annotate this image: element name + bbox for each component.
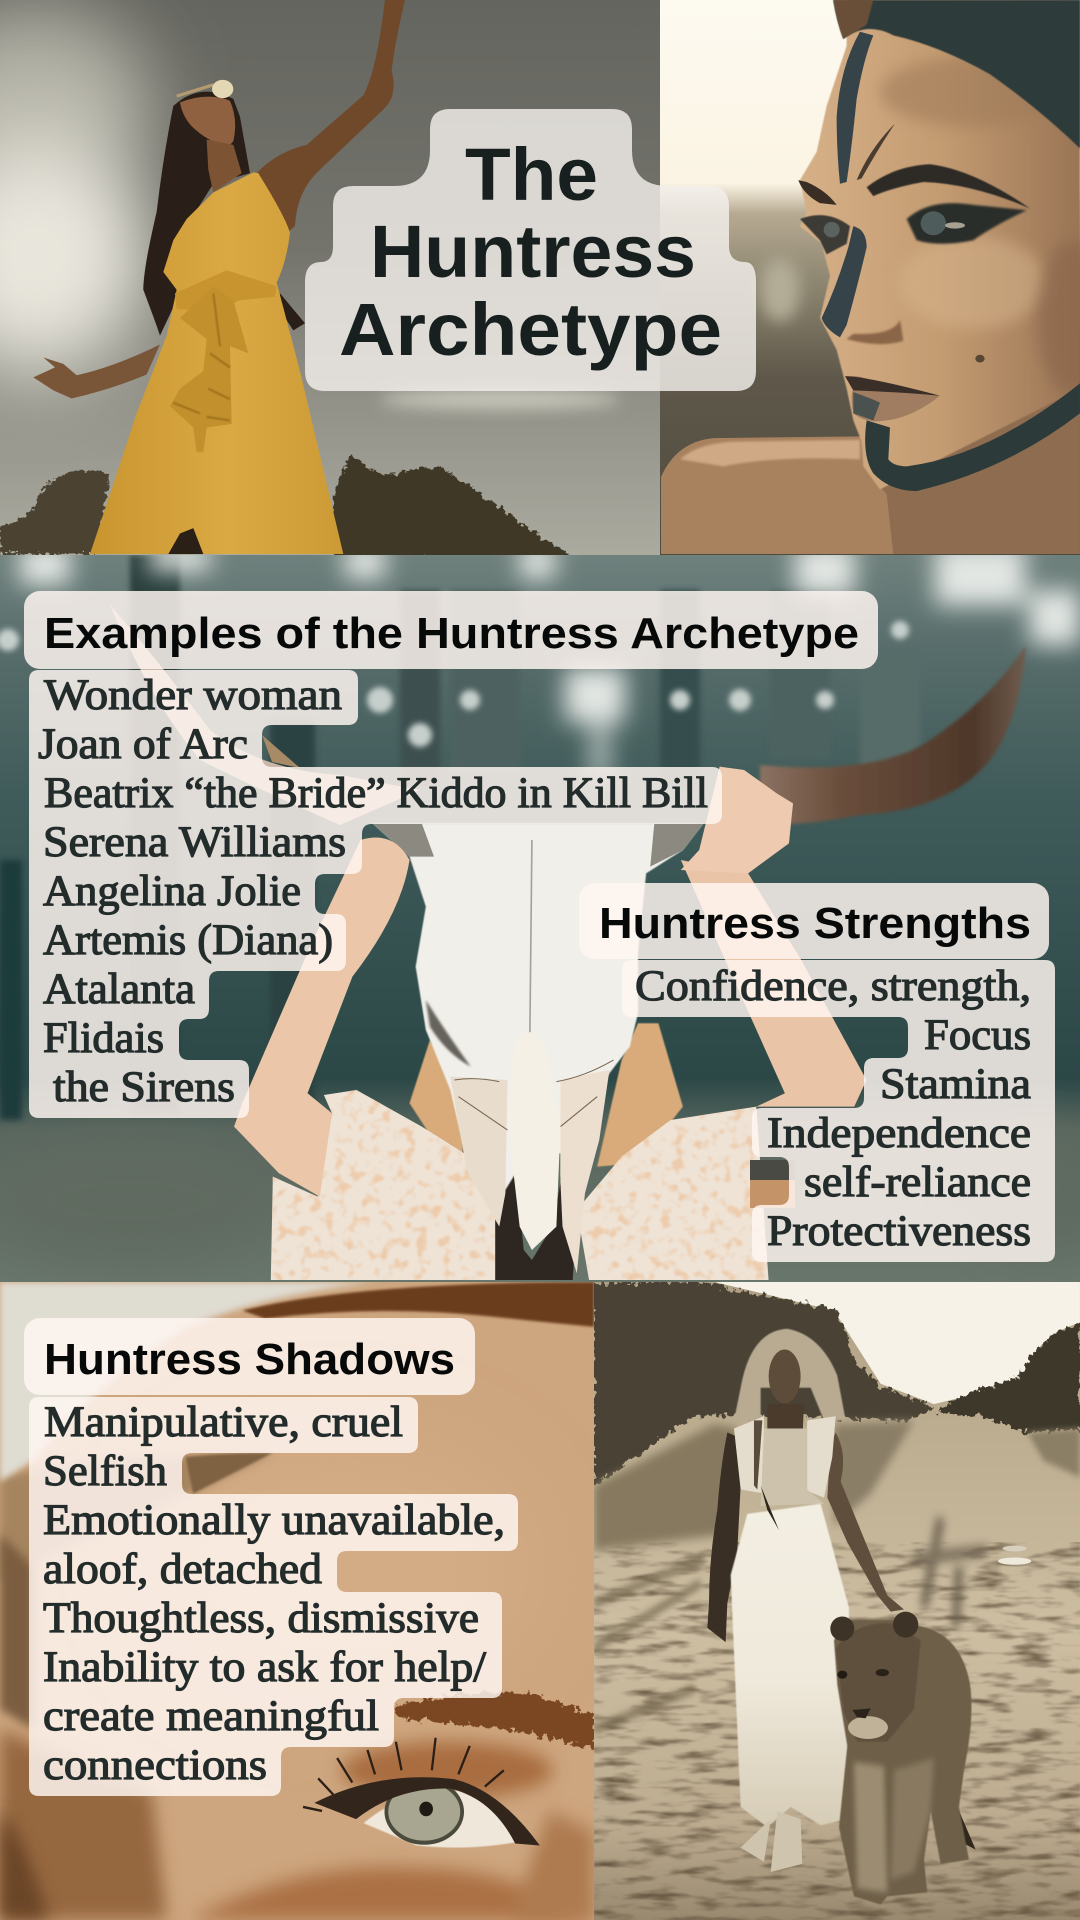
list: strengths: Confidence, strength, — [635, 963, 1031, 1010]
list: shadows: Inability to ask for help/ — [43, 1644, 486, 1691]
list: examples: Beatrix “the Bride” Kiddo in Kill Bill — [44, 770, 708, 817]
photo: face with black war paint — [660, 0, 1080, 555]
title pill — [305, 109, 756, 391]
panel: huntress strengths — [579, 883, 1055, 1262]
list: examples: Angelina Jolie — [43, 868, 301, 915]
list pill: strengths — [622, 960, 1055, 1262]
heading pill: examples — [24, 591, 878, 669]
list: examples: Wonder woman — [44, 672, 342, 719]
list: examples: Atalanta — [43, 966, 195, 1013]
list: examples — [38, 672, 708, 1111]
list: examples: the Sirens — [53, 1064, 235, 1111]
list: shadows: create meaningful — [43, 1693, 379, 1740]
list: examples: Flidais — [43, 1015, 164, 1062]
list: strengths: self-reliance — [804, 1159, 1031, 1206]
list: examples: Serena Williams — [43, 819, 346, 866]
photo: woman in yellow dress — [0, 0, 660, 558]
list: strengths: Stamina — [880, 1061, 1031, 1108]
list pill: examples — [29, 670, 722, 1118]
photo: woman walking with lioness on dirt road — [594, 1278, 1080, 1920]
list: shadows: Thoughtless, dismissive — [43, 1595, 479, 1642]
list pill: shadows — [29, 1397, 518, 1796]
list: shadows: connections — [43, 1742, 267, 1789]
list: strengths: Protectiveness — [767, 1208, 1031, 1255]
list: examples: Joan of Arc — [38, 721, 248, 768]
photo: woman holding bull skull in forest — [0, 545, 1080, 1282]
panel: huntress shadows — [24, 1318, 518, 1796]
list: shadows: Emotionally unavailable, — [43, 1497, 505, 1544]
heading: examples: Examples of the Huntress Archetype — [44, 609, 859, 658]
list: strengths: Focus — [924, 1012, 1031, 1059]
heading pill: shadows — [24, 1318, 475, 1395]
title text — [339, 133, 722, 371]
heading: strengths: Huntress Strengths — [599, 899, 1031, 948]
list: shadows: Manipulative, cruel — [44, 1399, 403, 1446]
list: examples: Artemis (Diana) — [43, 917, 333, 964]
title text: The — [465, 133, 598, 216]
list: strengths — [635, 963, 1031, 1255]
photo: close-up of eye and hair — [0, 1282, 594, 1920]
title text: Huntress — [370, 210, 696, 293]
heading pill: strengths — [579, 883, 1049, 959]
list: shadows: Selfish — [43, 1448, 167, 1495]
title block — [305, 109, 756, 391]
panel: examples of the huntress archetype — [24, 591, 878, 1118]
list: shadows — [43, 1399, 505, 1789]
list: shadows: aloof, detached — [43, 1546, 322, 1593]
heading: shadows: Huntress Shadows — [44, 1335, 455, 1384]
title text: Archetype — [339, 288, 722, 371]
list: strengths: Independence — [767, 1110, 1031, 1157]
